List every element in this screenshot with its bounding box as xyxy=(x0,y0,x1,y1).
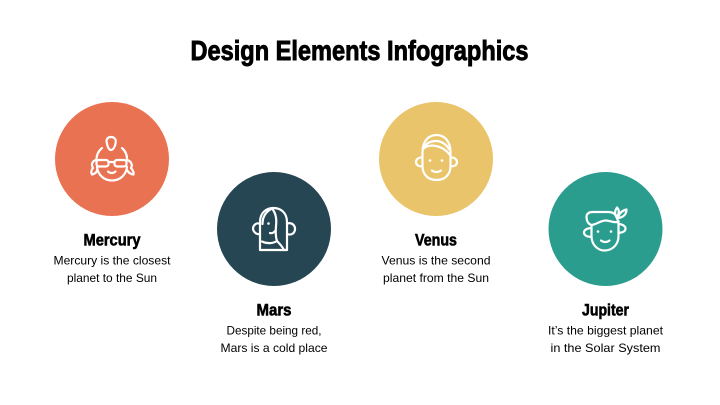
heading: Venus: Venus xyxy=(415,230,457,250)
circle: Mercury xyxy=(55,102,169,216)
panel: Mars xyxy=(217,172,331,355)
text: Jupiter description: It’s the biggest planet xyxy=(548,324,664,338)
icon: person with headband xyxy=(416,135,457,180)
heading: Mars: Mars xyxy=(256,300,292,320)
heading: Jupiter: Jupiter xyxy=(582,300,629,320)
icon: girl with glasses and bun xyxy=(91,137,134,180)
icon: person with feather hat xyxy=(584,208,626,250)
panel: Mercury xyxy=(54,102,171,285)
circle: Venus xyxy=(379,102,493,216)
circle: Mars xyxy=(217,172,331,286)
text: Venus description: planet from the Sun xyxy=(383,271,489,285)
icon: woman with long hair xyxy=(253,208,295,250)
text: Venus description: Venus is the second xyxy=(382,254,490,268)
panel: Venus xyxy=(379,102,493,285)
text: Mars description: Despite being red, xyxy=(226,324,322,338)
text: Jupiter description: in the Solar System xyxy=(550,341,661,355)
title: Design Elements Infographics xyxy=(190,35,528,66)
text: Mars description: Mars is a cold place xyxy=(220,341,328,355)
text: Mercury description: planet to the Sun xyxy=(67,271,157,285)
circle: Jupiter xyxy=(548,172,662,286)
text: Mercury description: Mercury is the closest xyxy=(54,254,171,268)
heading: Mercury: Mercury xyxy=(84,230,141,250)
panel: Jupiter xyxy=(548,172,664,355)
